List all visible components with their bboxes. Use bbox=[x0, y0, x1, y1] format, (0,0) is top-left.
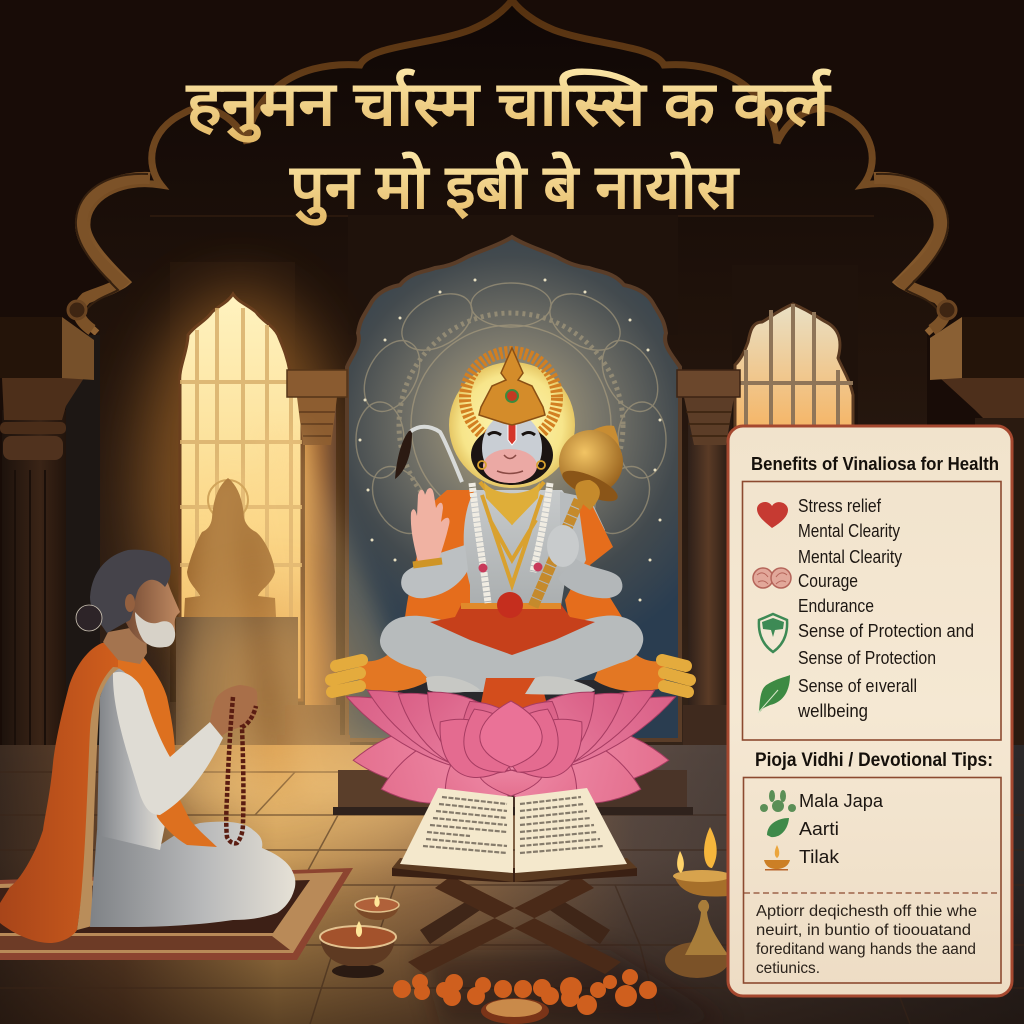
crown jewel bbox=[506, 390, 518, 402]
title: हनुमन र्चास्म चास्सि क कर्ल bbox=[185, 68, 832, 143]
statue plinth bbox=[176, 617, 298, 747]
central niche with mandala bbox=[347, 237, 680, 740]
note paragraph: Aptiorr deqichesth off thie whe bbox=[756, 903, 977, 920]
rear stand legs bbox=[420, 893, 610, 944]
left column bbox=[0, 317, 100, 760]
raised hand bbox=[411, 488, 450, 562]
Hanuman figure bbox=[380, 348, 643, 708]
left window glow bbox=[140, 290, 340, 670]
light rays from window bbox=[170, 430, 440, 800]
earrings bbox=[478, 461, 545, 469]
lotus pedestal bbox=[333, 680, 693, 815]
dhoti bbox=[430, 603, 595, 655]
beard bbox=[135, 612, 175, 648]
right column bbox=[930, 317, 1024, 760]
open book on stand bbox=[392, 788, 637, 974]
left arm bbox=[401, 545, 468, 598]
right page bbox=[515, 788, 627, 873]
beige shawl lining bbox=[77, 667, 125, 930]
icon: heart bbox=[757, 502, 788, 528]
shoulder cloth bbox=[405, 478, 622, 625]
garland flowers bbox=[478, 562, 542, 572]
book cover bbox=[392, 858, 513, 882]
heading: benefits: Benefits of Vinaliosa for Health bbox=[751, 454, 999, 474]
face bbox=[482, 413, 542, 483]
torso bbox=[450, 490, 577, 612]
benefits text: Mental Clearity bbox=[798, 521, 900, 541]
aureole rays bbox=[465, 352, 557, 444]
icon: aarti leaf bbox=[767, 818, 789, 837]
benefits text bbox=[797, 496, 974, 721]
small oil lamp bbox=[355, 895, 399, 920]
flower garland bbox=[472, 483, 550, 603]
tail tuft bbox=[395, 430, 412, 479]
collar and neck bbox=[103, 625, 147, 664]
mala beads bbox=[226, 697, 256, 843]
rug bbox=[0, 868, 353, 960]
right arched window bbox=[735, 304, 853, 430]
benefits text: Sense of Protection bbox=[798, 648, 936, 668]
icon: brain bbox=[753, 568, 791, 588]
note paragraph: foreditand wang hands the aand bbox=[756, 941, 976, 958]
tips text: Mala Japa bbox=[799, 790, 884, 811]
offering plate bbox=[481, 998, 549, 1024]
center-left pillar bbox=[277, 370, 350, 760]
title: पुन मो इबी बे नायोस bbox=[289, 151, 740, 226]
note paragraph: cetiunics. bbox=[756, 960, 820, 977]
eyes bbox=[488, 432, 535, 435]
box: devotional tips bbox=[744, 778, 1001, 983]
muzzle bbox=[483, 449, 537, 483]
panel: benefits and devotional tips bbox=[728, 426, 1012, 996]
icon: shield bbox=[759, 614, 787, 652]
tilak bbox=[508, 416, 516, 445]
page text lines bbox=[423, 797, 603, 853]
feet bbox=[426, 676, 595, 695]
statue silhouette in window bbox=[184, 478, 276, 617]
hands bbox=[210, 685, 257, 736]
arm bbox=[113, 672, 223, 815]
note paragraph: neuirt, in buntio of tioouatand bbox=[756, 922, 971, 939]
central petal bbox=[480, 701, 542, 767]
head bbox=[120, 563, 180, 645]
hair bun bbox=[76, 605, 102, 631]
left arched window bbox=[180, 294, 302, 700]
hair bbox=[90, 550, 171, 633]
benefits text: Sense of eıverall bbox=[798, 676, 917, 696]
icon: leaf bbox=[758, 675, 790, 713]
benefits text: Sense of Protection and bbox=[798, 621, 974, 641]
mace head bbox=[559, 425, 623, 510]
devotee figure bbox=[0, 550, 295, 943]
hair bbox=[471, 425, 553, 485]
benefits text: wellbeing bbox=[797, 701, 868, 721]
heading: devotional tips: Pioja Vidhi / Devotional Tips: bbox=[755, 750, 993, 771]
right arm bbox=[558, 558, 622, 598]
holding hand bbox=[547, 525, 579, 567]
legs bbox=[380, 616, 643, 692]
ear bbox=[125, 594, 135, 612]
sacred knot bbox=[497, 592, 523, 618]
icon: mala japa bbox=[760, 790, 796, 812]
benefits text: Courage bbox=[798, 571, 858, 591]
mace handle bbox=[533, 500, 579, 607]
left page bbox=[400, 788, 513, 873]
tail bbox=[410, 427, 462, 482]
back lower petals bbox=[352, 721, 670, 832]
orange shawl back bbox=[0, 640, 146, 943]
tips text: Aarti bbox=[799, 818, 839, 839]
upper petals bbox=[338, 669, 684, 794]
box: benefits list bbox=[742, 482, 1001, 740]
title bbox=[185, 68, 832, 226]
icon: tilak lamp bbox=[764, 845, 790, 870]
tips text: Tilak bbox=[799, 846, 840, 867]
center-right pillar bbox=[675, 370, 752, 758]
carved arch opening bbox=[68, 0, 956, 760]
benefits text: Mental Clearity bbox=[798, 547, 902, 567]
benefits text: Endurance bbox=[798, 596, 874, 616]
gold necklaces bbox=[480, 482, 544, 585]
tips text bbox=[799, 790, 884, 867]
nose and mouth bbox=[497, 455, 523, 474]
seated legs bbox=[90, 822, 295, 927]
hanging cloth bbox=[480, 678, 548, 708]
rear wall panels bbox=[170, 215, 858, 702]
benefits text: Stress relief bbox=[798, 496, 882, 516]
note paragraph bbox=[756, 903, 977, 977]
front stand legs bbox=[408, 876, 621, 974]
bracelet bbox=[413, 561, 442, 565]
crown bbox=[479, 348, 545, 425]
brass lamp bbox=[665, 827, 731, 978]
inner side petals bbox=[423, 697, 599, 793]
kurta torso bbox=[97, 668, 167, 850]
right shoulder bbox=[560, 492, 605, 570]
orange shawl front bbox=[118, 653, 217, 847]
lotus bbox=[338, 669, 684, 832]
orange sash drapes and tassels bbox=[331, 630, 690, 692]
halo glow bbox=[449, 362, 575, 488]
waist belt bbox=[461, 603, 561, 609]
floor tiles bbox=[0, 745, 1024, 1024]
large oil lamp bbox=[320, 921, 396, 978]
golden collar bbox=[484, 482, 540, 525]
stand top bbox=[392, 868, 637, 882]
marigold flowers bbox=[393, 969, 657, 1015]
